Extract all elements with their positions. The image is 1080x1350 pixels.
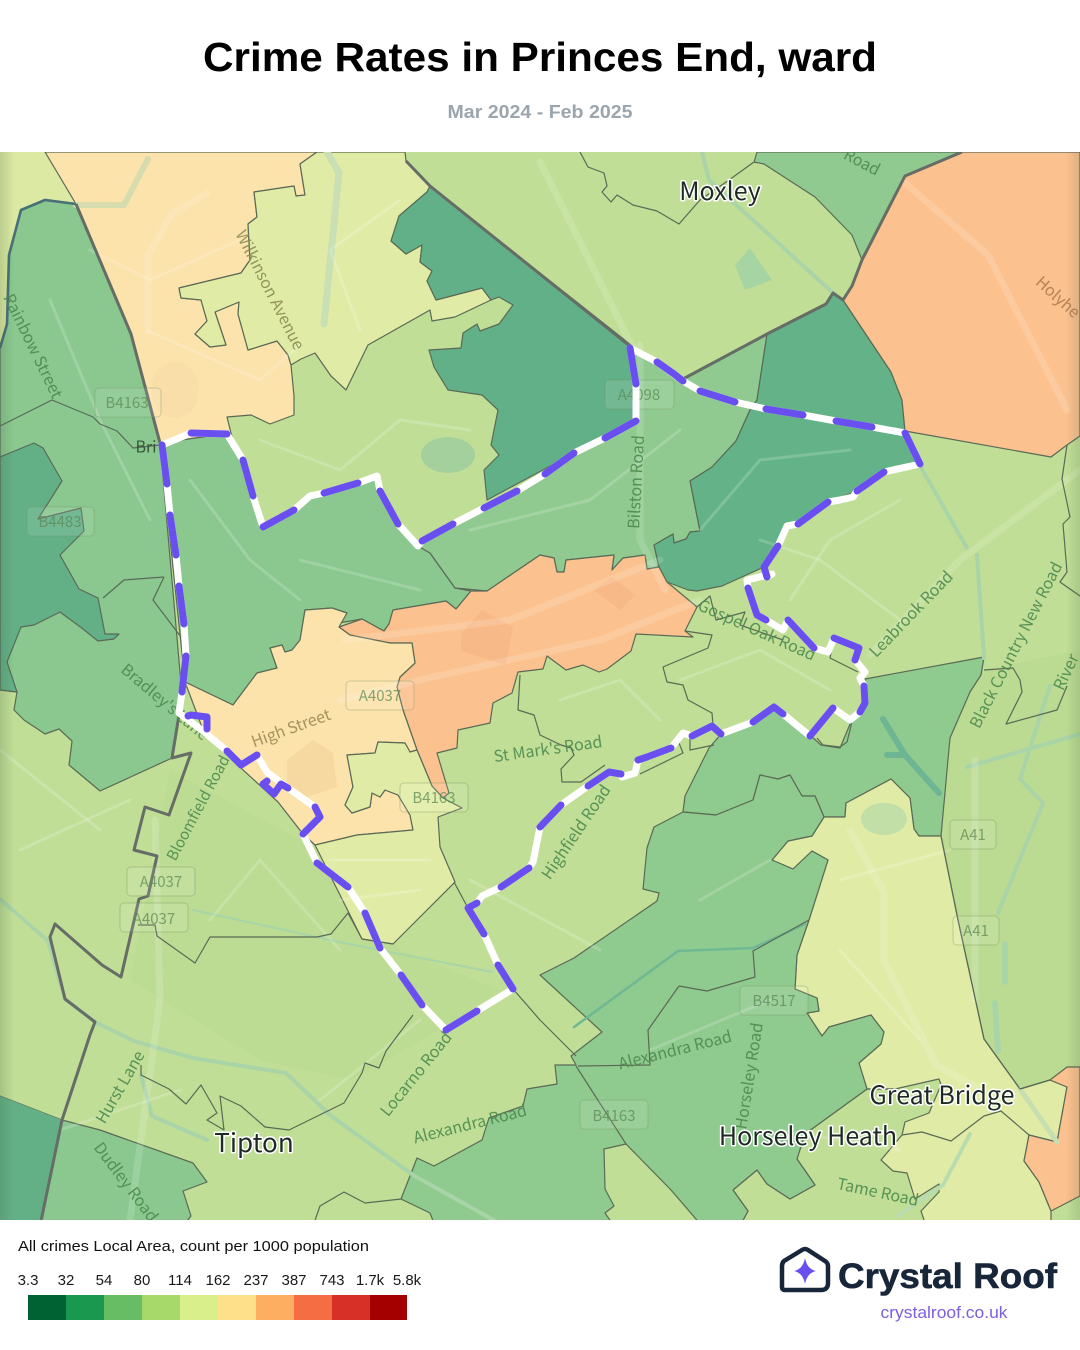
road shields: B4517: [752, 990, 796, 1011]
place names: [214, 172, 1014, 1160]
legend tick labels: 114: [168, 1272, 192, 1289]
borough boundary: north: [683, 152, 962, 379]
legend tick labels: 32: [58, 1272, 74, 1289]
road labels: Alexandra Road: [615, 1023, 734, 1074]
borough boundary: west: [76, 204, 160, 443]
road labels: Alexandra Road: [410, 1097, 529, 1148]
road shields: B4163: [592, 1105, 636, 1126]
road labels: High Street: [247, 701, 334, 752]
logo url: crystalroof.co.uk: [880, 1304, 1008, 1322]
road labels: Gospel Oak Road: [695, 592, 820, 665]
minor ward boundaries: [0, 152, 1080, 1226]
road labels: Horseley Road: [727, 1021, 768, 1131]
road shields: B4163: [105, 392, 149, 413]
legend colour ramp: [28, 1295, 407, 1320]
icon: house with sparkle: [782, 1249, 828, 1290]
road labels: Road: [840, 141, 885, 180]
road shields: [27, 380, 999, 1129]
parks and shaded blocks: [287, 248, 907, 835]
ward boundary: purple dashes: [162, 348, 920, 1030]
borough boundary: north-east: [406, 161, 631, 347]
legend tick labels: 3.3: [18, 1272, 38, 1289]
road labels: Highfield Road: [534, 779, 615, 883]
road labels: St Mark's Road: [492, 728, 604, 767]
river: north-west curve: [0, 200, 76, 348]
road labels: Bloomfield Road: [161, 752, 234, 864]
road labels: Locarno Road: [373, 1026, 457, 1121]
road shields: B4483: [38, 511, 82, 532]
road labels: Bilston Road: [620, 434, 649, 529]
logo wordmark: Crystal Roof: [838, 1257, 1057, 1296]
road labels: Hurst Lane: [88, 1045, 149, 1127]
roads: [0, 162, 1080, 1220]
legend: [18, 1238, 422, 1320]
legend tick labels: 387: [281, 1272, 307, 1289]
legend title: All crimes Local Area, count per 1000 population: [18, 1238, 369, 1255]
legend tick labels: [18, 1272, 422, 1289]
logo: Crystal Roof: [782, 1249, 1057, 1322]
map edge shading: [0, 152, 1080, 1220]
road labels: Rainbow Street: [0, 289, 70, 402]
road labels: Black Country New Road: [962, 557, 1067, 732]
place names: Tipton: [214, 1123, 294, 1160]
road shields: A4037: [140, 871, 182, 892]
road labels: Bri: [135, 434, 157, 458]
legend tick labels: 80: [134, 1272, 150, 1289]
place names: Horseley Heath: [719, 1117, 897, 1153]
legend tick labels: 1.7k: [356, 1272, 385, 1289]
legend tick labels: 743: [319, 1272, 345, 1289]
road labels: Bradley's Lane: [117, 657, 215, 745]
road shields: A4098: [618, 384, 660, 405]
legend tick labels: 5.8k: [393, 1272, 422, 1289]
road shields: A41: [963, 920, 989, 941]
road labels: Dudley Road: [89, 1136, 165, 1226]
road labels: Leabrook Road: [862, 564, 958, 662]
road shields: A41: [960, 824, 986, 845]
title: Crime Rates in Princes End, ward: [203, 34, 877, 80]
choropleth regions: [0, 152, 1080, 1226]
road shields: A4037: [133, 908, 175, 929]
legend tick labels: 54: [96, 1272, 112, 1289]
borough boundary: south-west: [40, 715, 191, 1226]
legend tick labels: 237: [243, 1272, 269, 1289]
subtitle: date range: Mar 2024 - Feb 2025: [448, 101, 632, 122]
ward boundary: white underlay: [162, 348, 920, 1030]
road labels: Tame Road: [835, 1170, 921, 1211]
road shields: B4163: [412, 787, 456, 808]
place names: Moxley: [679, 172, 761, 208]
road labels: Wilkinson Avenue: [231, 225, 312, 354]
rivers and canals: [0, 152, 1080, 1223]
legend tick labels: 162: [205, 1272, 231, 1289]
road shields: A4037: [359, 685, 401, 706]
place names: Great Bridge: [870, 1076, 1014, 1112]
